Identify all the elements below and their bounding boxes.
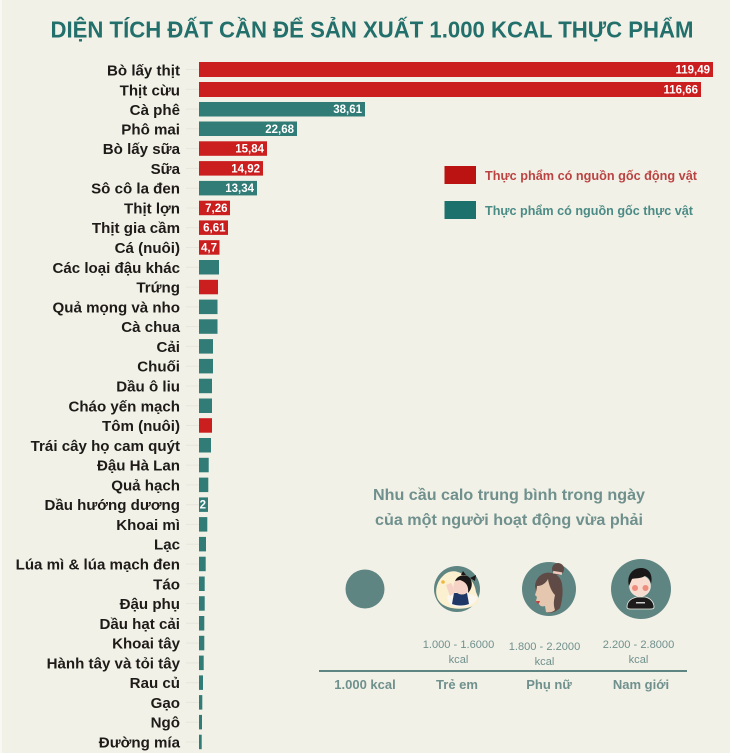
row: Sữa: 14,92: [231, 163, 260, 175]
calorie section heading: của một người hoạt động vừa phải: [375, 512, 643, 529]
row: Bò lấy thịt: 119,49: [675, 64, 710, 76]
legend: plant-based: Thực phẩm có nguồn gốc thực vật: [485, 204, 694, 218]
axis labels: Nam giới: [613, 677, 669, 692]
row: Thịt gia cầm: Thịt gia cầm: [92, 220, 180, 237]
row: Táo: [153, 576, 205, 593]
row: Quả mọng và nho: Quả mọng và nho: [53, 299, 180, 316]
row: Bò lấy thịt: [107, 62, 713, 80]
axis labels: 1.000 kcal: [334, 677, 396, 692]
row: Trứng: Trứng: [136, 280, 180, 297]
row: Bò lấy sữa: [103, 141, 267, 158]
row: Thịt cừu: [120, 82, 701, 99]
row: Chuối: [137, 359, 213, 376]
row: Dầu ô liu: [116, 378, 212, 396]
row: Sô cô la đen: [91, 181, 257, 198]
row: Thịt cừu: 116,66: [663, 84, 698, 96]
row: Lạc: [154, 537, 206, 554]
legend: [444, 166, 698, 219]
row: Hành tây và tỏi tây: Hành tây và tỏi tây: [47, 655, 181, 672]
calorie range: women: kcal: [535, 656, 554, 668]
row: Trái cây họ cam quýt: Trái cây họ cam quýt: [31, 438, 180, 455]
row: Cà phê: [130, 102, 365, 119]
row: Cà chua: [121, 319, 218, 336]
row: Rau củ: [130, 675, 203, 692]
row: Dầu ô liu: Dầu ô liu: [116, 378, 180, 396]
icon: child: [434, 566, 480, 612]
row: Đường mía: Đường mía: [99, 734, 181, 752]
row: Cà chua: Cà chua: [121, 319, 181, 336]
row: Thịt cừu: Thịt cừu: [120, 82, 180, 99]
legend: animal-based: [444, 166, 698, 184]
row: Các loại đậu khác: Các loại đậu khác: [52, 260, 180, 277]
row: Bò lấy sữa: 15,84: [235, 144, 265, 156]
row: Dầu hạt cải: Dầu hạt cải: [99, 616, 180, 633]
row: Cá (nuôi): [115, 240, 220, 257]
legend: plant-based: [444, 201, 694, 219]
row: Thịt lợn: [124, 200, 230, 218]
row: Trứng: [136, 280, 218, 297]
row: Cá (nuôi): 4,7: [201, 242, 217, 254]
row: Tôm (nuôi): Tôm (nuôi): [102, 418, 180, 435]
row: Thịt gia cầm: [92, 220, 228, 237]
row: Táo: Táo: [153, 576, 180, 593]
row: Khoai mì: Khoai mì: [116, 517, 180, 534]
row: Cà phê: 38,61: [333, 104, 363, 116]
row: Gạo: Gạo: [151, 695, 180, 712]
row: Thịt gia cầm: 6,61: [203, 223, 226, 235]
calorie range: men: kcal: [629, 654, 648, 666]
row: Sô cô la đen: 13,34: [225, 183, 255, 195]
row: Cải: Cải: [156, 339, 180, 356]
icon: woman: [522, 562, 576, 616]
row: Sữa: Sữa: [151, 161, 181, 178]
row: Gạo: [151, 695, 202, 712]
legend: animal-based: Thực phẩm có nguồn gốc động vật: [485, 169, 698, 183]
row: Quả hạch: Quả hạch: [111, 477, 180, 494]
calorie range: children: kcal: [449, 654, 468, 666]
row: Sữa: [151, 161, 263, 178]
row: Cháo yến mạch: Cháo yến mạch: [68, 398, 180, 415]
axis labels: Phụ nữ: [526, 677, 572, 692]
calorie section heading: [373, 487, 645, 529]
axis labels: [334, 677, 669, 692]
row: Ngô: [151, 715, 202, 732]
row: Bò lấy sữa: Bò lấy sữa: [103, 141, 181, 158]
calorie range: children: [423, 639, 494, 666]
row: Sô cô la đen: Sô cô la đen: [91, 181, 180, 198]
icon: man: [611, 559, 671, 619]
row: Dầu hướng dương: Dầu hướng dương: [44, 497, 180, 514]
row: Khoai tây: Khoai tây: [112, 636, 181, 653]
row: Dầu hướng dương: 2: [200, 500, 206, 512]
calorie range: women: 1.800 - 2.2000: [509, 641, 580, 653]
row: Phô mai: Phô mai: [121, 121, 180, 138]
row: Bò lấy thịt: Bò lấy thịt: [107, 63, 180, 80]
row: Lúa mì & lúa mạch đen: Lúa mì & lúa mạch đen: [16, 556, 180, 574]
row: Chuối: Chuối: [137, 359, 180, 376]
row: Đậu Hà Lan: Đậu Hà Lan: [97, 458, 180, 475]
calorie range: men: 2.200 - 2.8000: [603, 639, 674, 651]
row: Cà phê: Cà phê: [130, 102, 180, 119]
row: Ngô: Ngô: [151, 715, 180, 732]
row: Thịt lợn: Thịt lợn: [124, 200, 180, 218]
calorie range: children: 1.000 - 1.6000: [423, 639, 494, 651]
calorie range: women: [509, 641, 580, 668]
row: Rau củ: Rau củ: [130, 675, 180, 692]
row: Thịt lợn: 7,26: [205, 203, 228, 215]
circle: 1.000 kcal: [346, 570, 384, 608]
title: DIỆN TÍCH ĐẤT CẦN ĐỂ SẢN XUẤT 1.000 KCAL THỰC PHẨM: [50, 14, 694, 42]
calorie section heading: Nhu cầu calo trung bình trong ngày: [373, 487, 645, 504]
row: Phô mai: 22,68: [265, 124, 295, 136]
row: Phô mai: [121, 121, 297, 138]
row: Lạc: Lạc: [154, 537, 180, 554]
row: Cải: [156, 339, 213, 356]
calorie range: men: [603, 639, 674, 666]
row: Đậu phụ: Đậu phụ: [120, 596, 180, 613]
row: Cá (nuôi): Cá (nuôi): [115, 240, 180, 257]
axis labels: Trẻ em: [436, 677, 478, 692]
